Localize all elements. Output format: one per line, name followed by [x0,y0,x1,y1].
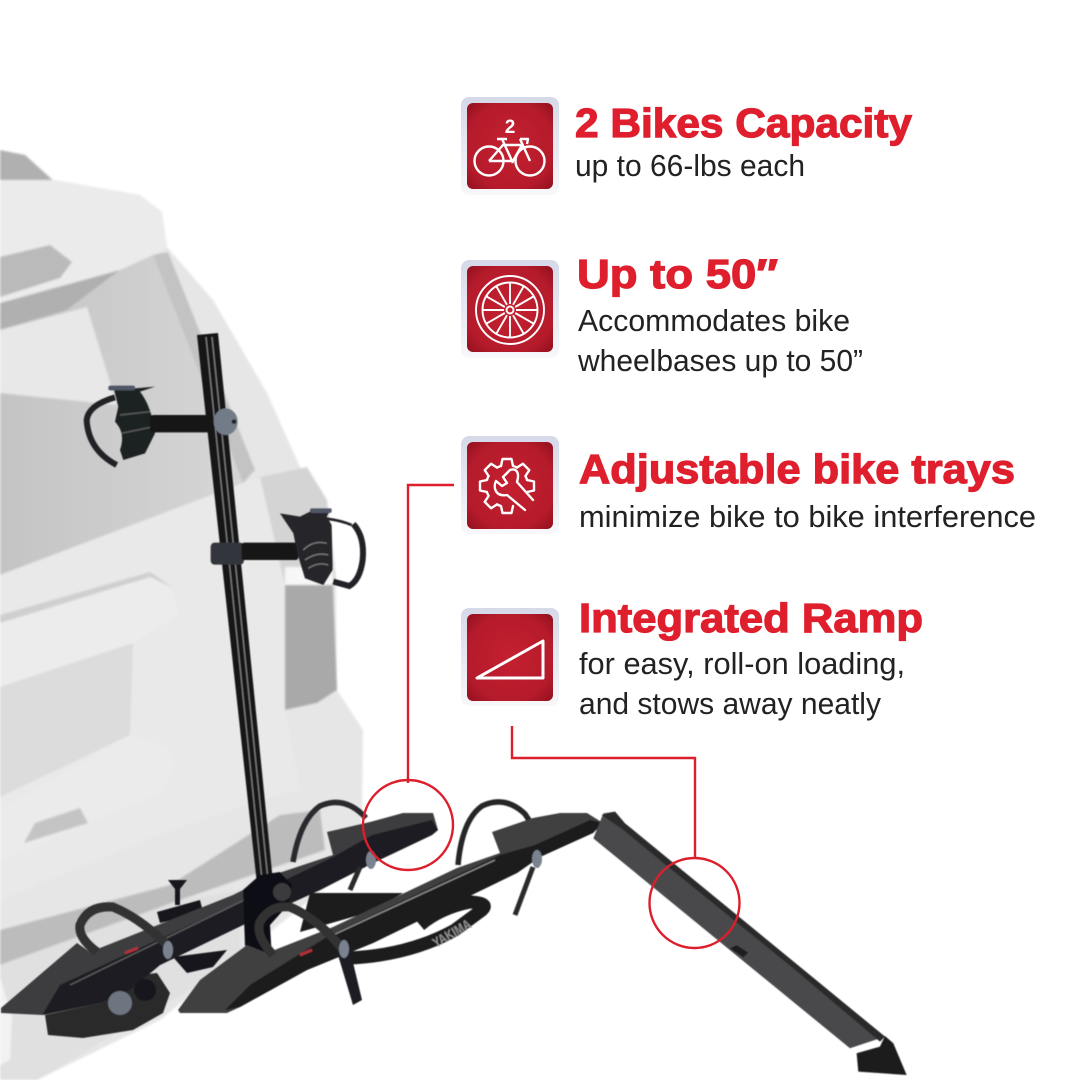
icon: ramp [461,608,559,706]
hitch pin [134,979,156,1001]
description [579,646,905,721]
heading: Up to 50″ [577,251,778,297]
handle [350,902,484,958]
strap tails [350,867,533,915]
red labels [125,948,312,955]
feature: trays [461,436,1036,534]
car rear [0,150,363,1080]
icon: bike [461,97,559,195]
lower wheel cradle [211,508,363,586]
feature: wheelbase [461,251,863,378]
strap buttons [163,850,542,959]
ramp [593,812,907,1075]
upper wheel cradle [87,386,238,465]
feature: capacity [461,97,912,195]
heading: Integrated Ramp [579,595,923,641]
heading: Adjustable bike trays [579,446,1015,492]
front back strap [458,802,535,865]
description [577,303,863,378]
hitch knob [157,880,202,923]
description: wheelbases up to 50” [577,343,863,378]
rear tray [1,813,438,1015]
upright pole [197,333,273,884]
rear back strap [293,802,366,862]
description: for easy, roll-on loading, [579,646,905,681]
icon: bike: 2 [505,117,515,138]
front tray strap [259,907,343,955]
leader: adjustable trays [408,485,454,783]
circle: ramp [650,858,740,948]
description: and stows away neatly [579,686,881,721]
hitch [45,973,170,1038]
rack brand: YAKIMA [430,916,474,951]
heading: 2 Bikes Capacity [575,100,912,146]
bike rack [1,333,907,1075]
cross bars [300,893,403,932]
description: up to 66-lbs each [575,148,805,183]
description: Accommodates bike [578,303,850,338]
feature: ramp [461,595,923,721]
rear tray strap [80,907,167,952]
icon: gear and wrench [461,436,559,534]
front tray [178,813,603,1013]
description: minimize bike to bike interference [579,499,1036,534]
icon: wheel [461,260,559,358]
leader lines and circles [363,485,740,948]
tower mount [243,872,292,965]
leader: ramp [512,726,695,858]
circle: tray end [363,780,453,870]
